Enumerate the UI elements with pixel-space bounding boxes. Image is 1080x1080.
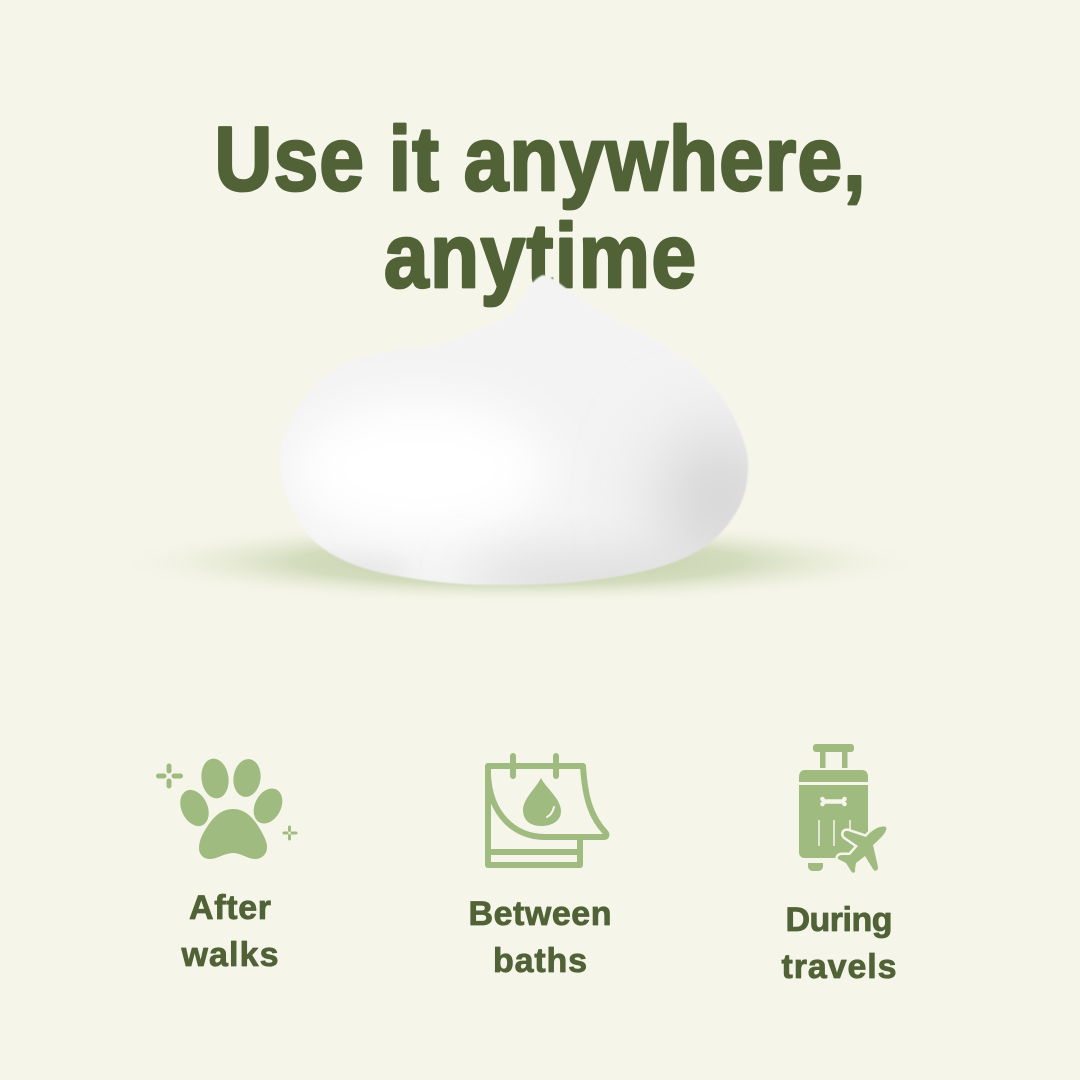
label: during travels: travels [782,948,896,986]
icon: suitcase with plane [799,744,886,873]
label: after walks: After [189,889,271,927]
label: between baths [468,895,612,980]
label: after walks: walks [180,936,278,974]
label: during travels [782,901,896,986]
icon: paw print [158,757,296,859]
title: anytime [384,205,696,307]
title [214,108,866,307]
foam blob [280,274,748,586]
title: Use it anywhere, [214,108,866,210]
label: between baths: Between [468,895,612,933]
label: between baths: baths [493,942,587,980]
foam shadow [110,520,930,604]
label: after walks [180,889,278,974]
icon: calendar with drop [488,756,606,865]
label: during travels: During [786,901,892,939]
